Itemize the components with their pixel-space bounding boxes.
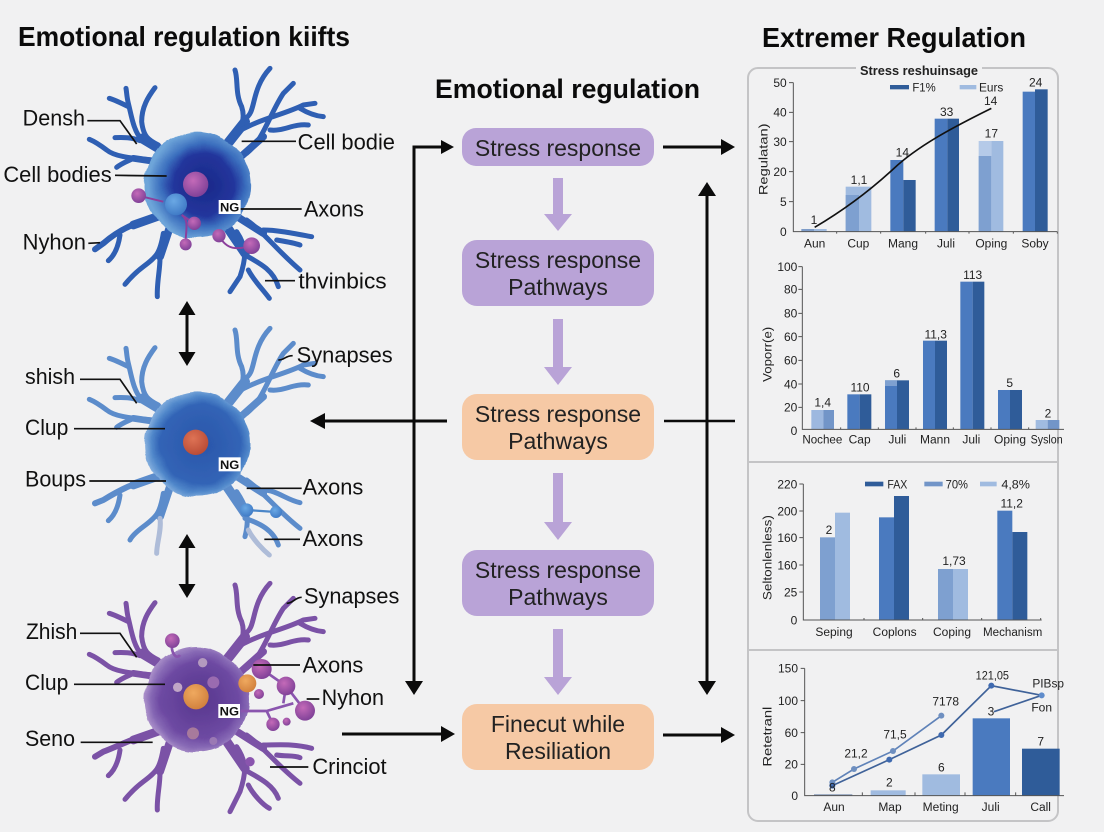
flow box: pathways 2: Stress response [475, 401, 641, 427]
legend [865, 477, 1030, 491]
value labels: 5 [1006, 376, 1013, 390]
y ticks: 0 [791, 424, 798, 438]
value labels: 17 [985, 127, 998, 141]
labels: Axons [304, 197, 364, 222]
labels: Axons [303, 526, 363, 551]
value labels: 2 [826, 523, 833, 537]
chart 1: bars and trend line [756, 76, 1057, 250]
x labels: Aun [804, 236, 825, 250]
value labels: 33 [940, 105, 954, 119]
neuron: bottom purple [25, 583, 399, 812]
x labels: Syslon [1031, 433, 1063, 447]
dendrites [89, 328, 323, 555]
y title: Regulatan) [756, 123, 770, 195]
line series dark [829, 683, 1045, 789]
value labels [811, 76, 1043, 227]
y ticks: 200 [777, 504, 798, 518]
labels [25, 583, 399, 779]
x labels [815, 625, 1042, 639]
y ticks: 0 [780, 225, 787, 239]
value labels: 110 [850, 381, 870, 395]
flow box: pathways 2: Pathways [508, 428, 608, 454]
trend line [815, 108, 991, 227]
x labels: Juli [982, 800, 1000, 814]
labels: Synapses [297, 343, 393, 368]
y ticks: 80 [784, 283, 798, 297]
y title: Retetranl [760, 707, 774, 767]
cell body [144, 647, 249, 752]
x labels: Juli [888, 433, 906, 447]
value labels: 14 [896, 146, 909, 160]
axes [801, 668, 1064, 796]
x labels: Oping [975, 236, 1007, 250]
x labels: Mechanism [983, 625, 1042, 639]
arrow: neuron 1 to 2 double [178, 301, 196, 366]
line series light [829, 713, 944, 785]
flow box: pathways 3: Stress response [475, 557, 641, 583]
x labels: Aun [823, 800, 845, 814]
panel title: Stress reshuinsage [860, 63, 978, 78]
value labels: Fon [1031, 701, 1052, 715]
y ticks: 0 [791, 613, 798, 627]
dendrites [89, 68, 323, 298]
x labels: Coping [933, 625, 971, 639]
legend: 4,8% [1001, 477, 1030, 491]
x labels: Map [878, 800, 902, 814]
y ticks: 160 [777, 531, 798, 545]
value labels [829, 668, 1064, 794]
arrow: box 3 to neuron [310, 413, 447, 429]
x labels: Juli [937, 236, 955, 250]
legend: 70% [946, 477, 968, 491]
arrow: box 1 to chart [663, 139, 735, 155]
value labels: 21,2 [844, 747, 868, 761]
value labels: 113 [963, 268, 983, 282]
value labels: 71,5 [883, 727, 907, 741]
value labels: 7 [1037, 735, 1044, 749]
flow box: pathways 3: Pathways [508, 584, 608, 610]
y ticks [773, 76, 787, 239]
organelles [131, 172, 260, 254]
legend: F1% [912, 80, 936, 94]
value labels: 121,05 [976, 668, 1009, 682]
neuron: top blue [3, 68, 395, 298]
labels: Seno [25, 726, 75, 751]
y ticks: 50 [773, 76, 787, 90]
flow box: pathways 1: Stress response [475, 247, 641, 273]
NG tag: NG [220, 705, 239, 719]
value labels: 7178 [932, 694, 959, 708]
arrow: lilac 4 [544, 629, 572, 695]
flow box: resiliation: Resiliation [505, 738, 611, 764]
x labels: Oping [994, 433, 1026, 447]
y ticks: 60 [784, 354, 798, 368]
arrow: lilac 1 [544, 178, 572, 231]
flow box: pathways 1 [462, 240, 654, 306]
bars [820, 496, 1027, 620]
value labels: 2 [1045, 407, 1052, 421]
flow box: stress response: Stress response [475, 135, 641, 161]
y ticks: 100 [777, 260, 798, 274]
labels: Clup [25, 415, 68, 440]
value labels: 24 [1029, 76, 1043, 90]
line: box 3 to chart [664, 420, 735, 422]
y title: Seltonlenless) [760, 515, 774, 600]
legend: Eurs [979, 80, 1003, 94]
y title: Voporr(e) [760, 327, 774, 382]
x labels [804, 236, 1049, 250]
chart 2: bars [760, 260, 1064, 447]
value labels [826, 496, 1023, 568]
y ticks: 20 [785, 758, 798, 772]
x labels: Mann [920, 433, 950, 447]
y ticks [777, 260, 798, 438]
axes [799, 484, 1042, 620]
value labels: 11,3 [924, 327, 947, 341]
panel: charts frame [748, 68, 1058, 821]
flow box: pathways 3 [462, 550, 654, 616]
arrow: neuron 2 to 3 double [178, 534, 196, 598]
y ticks: 30 [773, 135, 787, 149]
labels: Cell bodies [3, 162, 112, 187]
labels: Cell bodie [298, 129, 395, 154]
y ticks: 60 [785, 726, 798, 740]
chart 3: grouped bars [760, 477, 1042, 639]
value labels: 6 [893, 366, 900, 380]
axes [789, 83, 1057, 234]
labels: shish [25, 364, 75, 389]
labels: Densh [23, 105, 85, 130]
y ticks: 220 [777, 477, 798, 491]
flow box: stress response [462, 128, 654, 166]
arrow: left loop [405, 140, 454, 695]
x labels: Coplons [873, 625, 917, 639]
bars [811, 282, 1059, 429]
value labels: 8 [829, 780, 836, 794]
y ticks: 20 [773, 165, 787, 179]
title: center: Emotional regulation [435, 74, 700, 104]
y ticks: 25 [784, 585, 798, 599]
arrow: box 5 to chart [663, 727, 735, 743]
labels: Axons [303, 653, 363, 678]
title: left: Emotional regulation kiifts [18, 21, 350, 52]
x labels [802, 433, 1063, 447]
labels: Boups [25, 467, 86, 492]
x labels: Cup [847, 236, 870, 250]
y ticks: 80 [784, 307, 798, 321]
legend: FAX [887, 477, 907, 491]
cell body [145, 391, 250, 497]
x labels: Nochee [802, 433, 843, 447]
axes [798, 267, 1064, 429]
value labels: 11,2 [1000, 496, 1023, 510]
y ticks [777, 477, 798, 627]
y ticks: 20 [784, 401, 798, 415]
y ticks: 40 [773, 106, 787, 120]
value labels: 14 [984, 94, 998, 108]
bars [801, 89, 1048, 232]
title: right: Extremer Regulation [762, 22, 1026, 53]
x labels [823, 800, 1051, 814]
y ticks: 150 [778, 662, 798, 676]
x labels: Seping [815, 625, 853, 639]
labels [25, 343, 393, 551]
labels: Nyhon [23, 229, 86, 254]
x labels: Soby [1021, 236, 1049, 250]
labels: Clup [25, 670, 68, 695]
y ticks: 0 [791, 789, 798, 803]
organelles [165, 633, 315, 766]
chart 4: bars with lines [760, 662, 1064, 814]
neuron: middle blue [25, 328, 393, 555]
value labels: 2 [886, 775, 893, 789]
arrow: lilac 3 [544, 473, 572, 540]
legend [890, 80, 1003, 94]
NG tag: NG [220, 458, 239, 472]
arrow: neuron 3 to box 5 [342, 726, 455, 742]
value labels: 1 [811, 213, 818, 227]
labels: Axons [303, 474, 363, 499]
y ticks: 40 [784, 377, 798, 391]
organelles [183, 430, 282, 518]
labels: Synapses [304, 583, 399, 608]
arrow: right double vertical [698, 182, 716, 695]
labels: Nyhon [322, 685, 384, 710]
labels: Zhish [26, 619, 77, 644]
flow box: resiliation: Finecut while [491, 711, 625, 737]
labels: Crinciot [312, 754, 387, 779]
flow box: pathways 2 [462, 394, 654, 460]
y ticks: 60 [784, 330, 798, 344]
value labels: 1,4 [814, 396, 831, 410]
x labels: Mang [888, 236, 918, 250]
arrow: lilac 2 [544, 319, 572, 385]
value labels: 6 [938, 761, 945, 775]
value labels [814, 268, 1052, 421]
value labels: PIBsp [1032, 676, 1064, 690]
NG tag: NG [220, 201, 239, 215]
x labels: Call [1030, 800, 1051, 814]
labels [3, 105, 395, 293]
y ticks: 5 [780, 195, 787, 209]
labels: thvinbics [298, 268, 387, 293]
y ticks: 100 [778, 694, 798, 708]
y ticks [778, 662, 798, 803]
y ticks: 160 [777, 558, 798, 572]
dendrites [89, 583, 323, 812]
value labels: 1,73 [942, 554, 966, 568]
x labels: Meting [923, 800, 959, 814]
bars [814, 718, 1060, 796]
flow box: resiliation [462, 704, 654, 770]
flow box: pathways 1: Pathways [508, 274, 608, 300]
value labels: 1,1 [851, 173, 868, 187]
value labels: 3 [988, 705, 995, 719]
cell body [144, 132, 251, 238]
x labels: Cap [849, 433, 871, 447]
x labels: Juli [962, 433, 980, 447]
